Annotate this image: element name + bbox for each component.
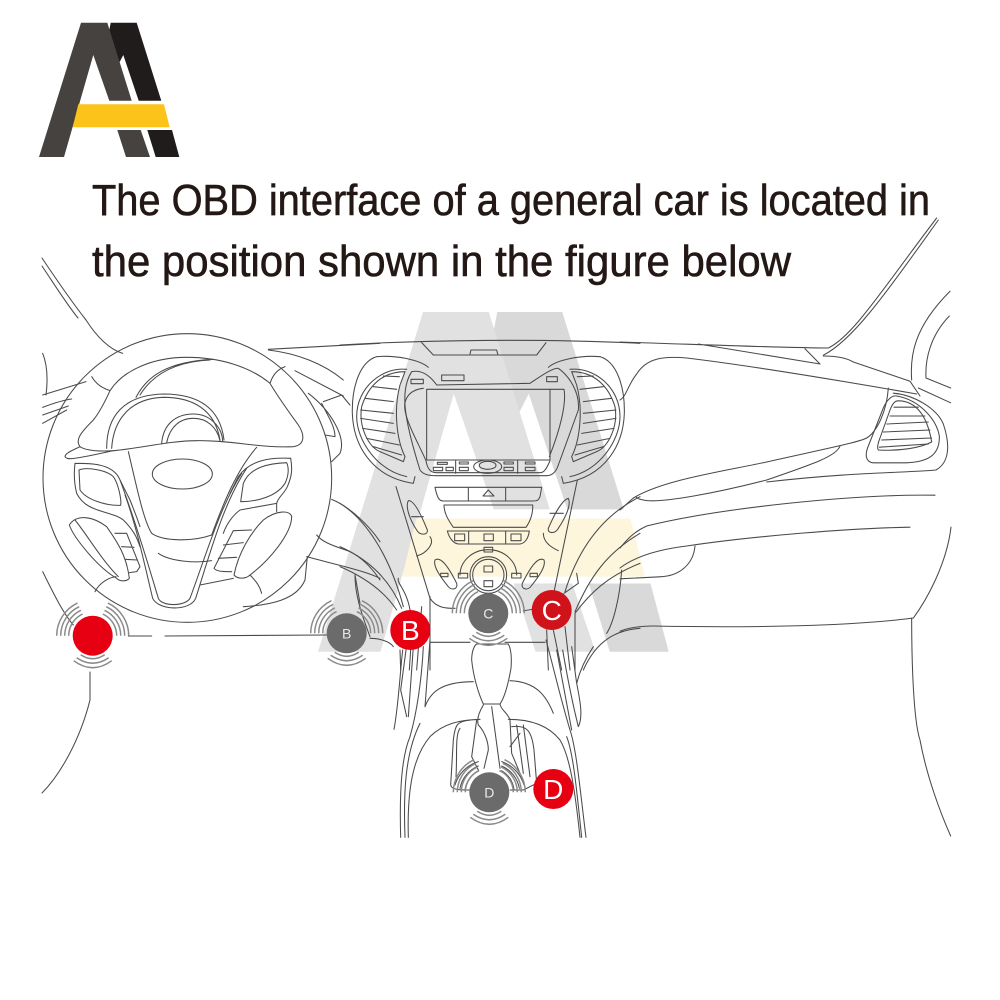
marker: red D: [533, 769, 573, 809]
title: [92, 176, 930, 286]
center screen panel: [405, 368, 579, 476]
marker: red C: C: [542, 595, 562, 626]
marker: red C: [532, 590, 572, 630]
marker: red D: D: [543, 774, 563, 805]
marker: gray D: [453, 760, 525, 824]
marker: gray D: D: [484, 784, 494, 800]
console frame: [396, 480, 577, 611]
title: the position shown in the figure below: [92, 237, 791, 286]
dashboard line drawing: [42, 218, 951, 837]
marker: gray B: B: [342, 626, 351, 642]
left pillar and door: [42, 258, 90, 793]
marker: red B: [390, 610, 430, 650]
right air vent: [548, 356, 624, 483]
far right vent: [767, 393, 948, 482]
knee panels: [340, 497, 640, 670]
center console and vents: [340, 340, 640, 670]
steering wheel: [43, 320, 380, 637]
gear shifter and tunnel: [394, 640, 593, 837]
marker: red unlabeled position A: [57, 603, 129, 668]
left air vent: [352, 356, 428, 483]
logo: [39, 23, 179, 157]
marker: gray C: C: [483, 606, 493, 622]
marker: gray B: [311, 601, 383, 665]
marker: gray C: [452, 581, 524, 645]
right dashboard, glove box, door and vent: [620, 218, 951, 836]
marker: red B: B: [401, 615, 420, 646]
watermark logo: [318, 312, 669, 652]
title: The OBD interface of a general car is located in: [92, 176, 930, 225]
